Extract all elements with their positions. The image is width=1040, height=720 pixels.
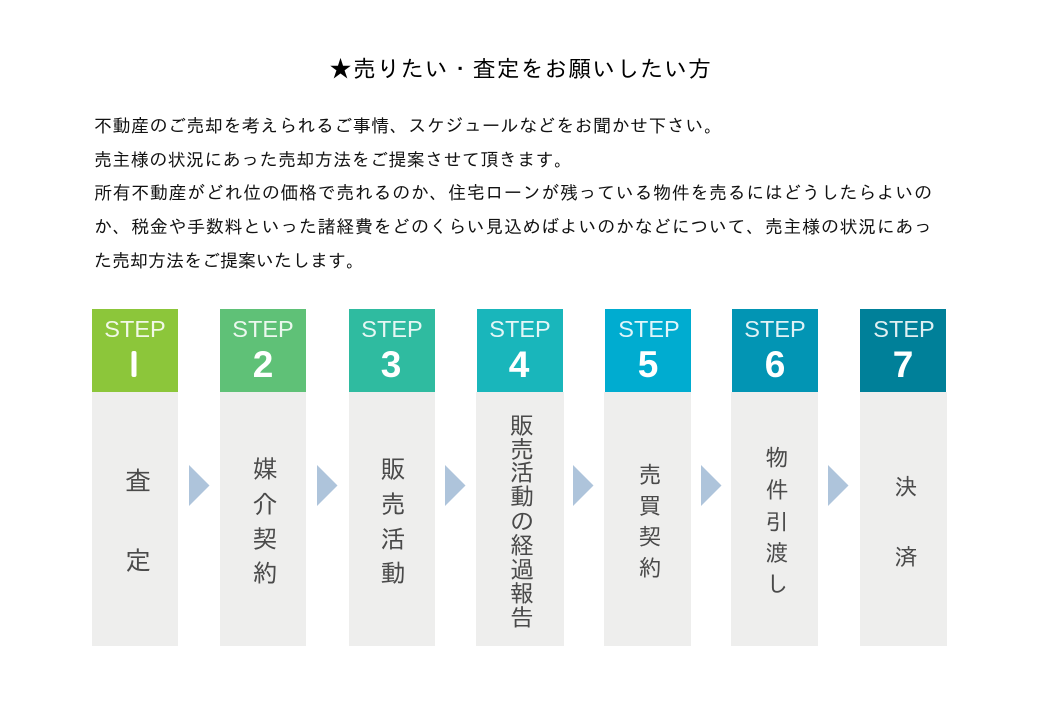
step 1 bbox=[92, 309, 178, 646]
step 5 bbox=[604, 309, 691, 646]
step 5: 契 bbox=[638, 524, 662, 550]
step 2: 約 bbox=[252, 560, 278, 588]
step 3: 動 bbox=[380, 560, 406, 588]
step 2: STEP bbox=[232, 316, 294, 342]
step 4: 経 bbox=[510, 533, 534, 560]
step 5: 5 bbox=[638, 344, 658, 385]
step 4: STEP bbox=[489, 316, 551, 342]
step 3: 3 bbox=[381, 344, 401, 385]
arrow 1 bbox=[189, 465, 210, 506]
step 7: STEP bbox=[873, 316, 935, 342]
intro text block bbox=[94, 116, 932, 271]
step 2: 契 bbox=[252, 526, 278, 554]
step 4: 告 bbox=[510, 605, 534, 632]
step 5: 約 bbox=[638, 555, 662, 581]
step 5: STEP bbox=[618, 316, 680, 342]
arrow 6 bbox=[828, 465, 848, 506]
step 4 bbox=[476, 309, 564, 646]
step 1: STEP bbox=[104, 316, 166, 342]
step 3: 活 bbox=[380, 526, 406, 554]
step 6: 件 bbox=[766, 477, 788, 503]
step 2: 介 bbox=[252, 491, 278, 519]
step 7: 済 bbox=[894, 544, 918, 570]
step 1: 定 bbox=[125, 546, 151, 576]
step 4: の bbox=[510, 509, 534, 536]
step 6: し bbox=[766, 571, 788, 597]
arrow 3 bbox=[445, 465, 466, 506]
step 6 bbox=[731, 309, 818, 646]
step 3: 販 bbox=[380, 456, 406, 484]
step 6: 6 bbox=[765, 344, 785, 385]
step 7: 7 bbox=[893, 344, 913, 385]
intro text block: 不動産のご売却を考えられるご事情、スケジュールなどをお聞かせ下さい。 bbox=[94, 116, 722, 136]
step 3: 売 bbox=[380, 491, 406, 519]
step 2 bbox=[220, 309, 306, 646]
step 4: 販 bbox=[510, 413, 534, 440]
intro text block: か、税金や手数料といった諸経費をどのくらい見込めばよいのかなどについて、売主様の状況にあっ bbox=[94, 217, 932, 237]
step 4: 活 bbox=[510, 460, 534, 487]
step 4: 売 bbox=[510, 437, 534, 464]
arrow 4 bbox=[573, 465, 594, 506]
step 4: 4 bbox=[509, 344, 530, 385]
step 4: 過 bbox=[510, 557, 534, 584]
step 1: 査 bbox=[125, 466, 151, 496]
intro text block: た売却方法をご提案いたします。 bbox=[94, 251, 364, 271]
step 6: 渡 bbox=[766, 540, 788, 566]
step 7 bbox=[860, 309, 947, 646]
step 6: 引 bbox=[766, 509, 788, 535]
step 5: 売 bbox=[638, 462, 662, 488]
intro text block: 売主様の状況にあった売却方法をご提案させて頂きます。 bbox=[94, 150, 572, 170]
step 4: 動 bbox=[510, 484, 534, 511]
intro text block: 所有不動産がどれ位の価格で売れるのか、住宅ローンが残っている物件を売るにはどうしたらよいの bbox=[94, 183, 932, 203]
step 6: 物 bbox=[766, 445, 788, 471]
step 2: 媒 bbox=[252, 456, 278, 484]
step 4: 報 bbox=[510, 581, 534, 608]
step 3 bbox=[349, 309, 435, 646]
arrow 5 bbox=[701, 465, 722, 506]
step 7: 決 bbox=[894, 474, 918, 500]
step 2: 2 bbox=[253, 344, 273, 385]
step 5: 買 bbox=[638, 493, 662, 519]
step 3: STEP bbox=[361, 316, 423, 342]
title: ★売りたい・査定をお願いしたい方 bbox=[329, 56, 711, 82]
arrow 2 bbox=[317, 465, 338, 506]
step 6: STEP bbox=[744, 316, 806, 342]
